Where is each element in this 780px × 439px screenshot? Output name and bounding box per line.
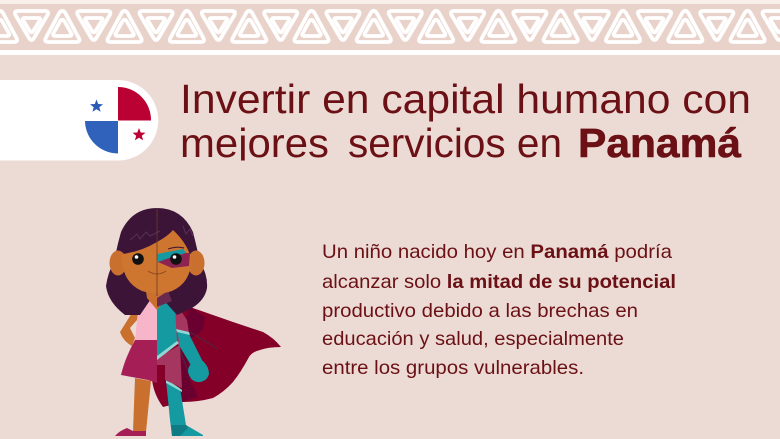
right arm bbox=[177, 330, 203, 367]
body text: entre los grupos vulnerables. bbox=[322, 357, 584, 379]
left arm bbox=[120, 300, 140, 346]
face bbox=[122, 230, 191, 294]
decorative top band bbox=[0, 0, 780, 55]
body text: Un niño nacido hoy en Panamá podría bbox=[322, 241, 672, 263]
hair bbox=[106, 208, 207, 315]
illustration: superhero girl bbox=[106, 208, 281, 436]
mask bbox=[157, 249, 186, 262]
eyebrow bbox=[168, 247, 184, 249]
right leg bbox=[166, 380, 203, 436]
teal suit torso bbox=[157, 297, 177, 358]
ears bbox=[110, 250, 204, 276]
body text bbox=[322, 241, 676, 379]
shoe bbox=[115, 428, 146, 436]
body text: educación y salud, especialmente bbox=[322, 328, 624, 350]
title: Panamá bbox=[578, 120, 741, 166]
title: mejores bbox=[180, 120, 329, 166]
body text: productivo debido a las brechas en bbox=[322, 300, 638, 322]
title bbox=[182, 84, 748, 160]
suit lower bbox=[157, 345, 182, 388]
maroon suit shoulder bbox=[157, 298, 189, 347]
icon: Panama flag bbox=[85, 87, 151, 154]
neck bbox=[145, 285, 170, 310]
fist bbox=[188, 361, 209, 382]
left leg bbox=[133, 378, 151, 432]
smile bbox=[148, 271, 166, 274]
body text: alcanzar solo la mitad de su potencial bbox=[322, 271, 676, 293]
skirt bbox=[121, 340, 157, 383]
cape bbox=[152, 307, 281, 407]
shirt bbox=[135, 296, 157, 340]
centre line bbox=[156, 208, 158, 296]
title: Invertir en capital humano con bbox=[180, 76, 751, 122]
flag pill bbox=[0, 80, 158, 160]
eyes bbox=[132, 253, 182, 265]
title: servicios en bbox=[348, 120, 562, 166]
hair strands bbox=[130, 226, 193, 240]
